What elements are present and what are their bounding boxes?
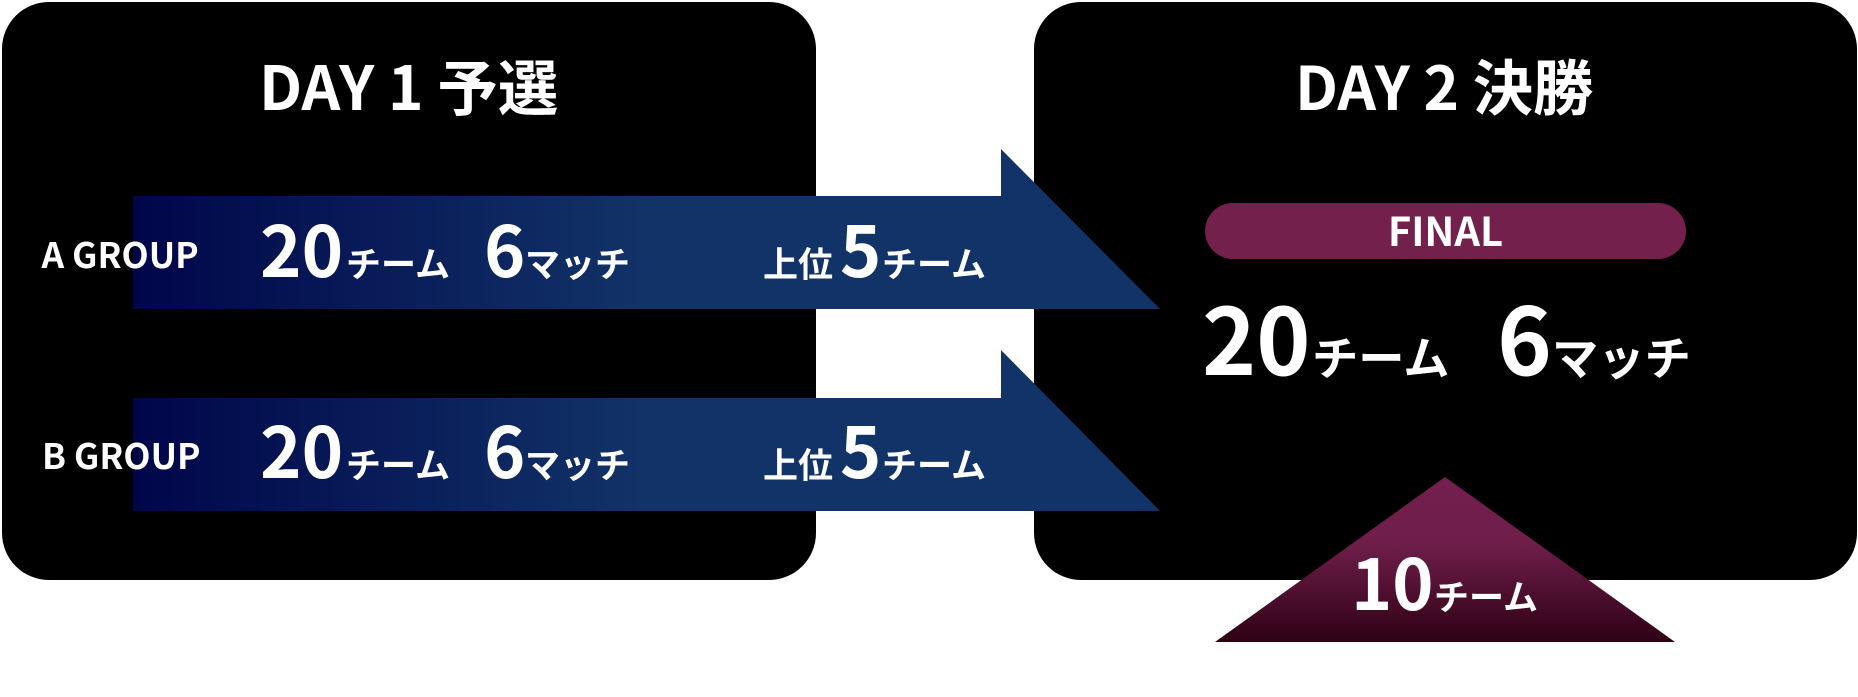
arrow: A group [133,149,1160,309]
triangle: 10 teams [1215,477,1675,642]
B group stats: 20 [260,397,343,499]
final stats: マッチ [1552,322,1691,389]
label: final: FINAL [1388,200,1503,258]
panel: day 2 [1034,2,1857,580]
panel: day 1 [2,2,816,580]
B group stats: マッチ [525,438,630,489]
A group stats: 5 [840,197,881,298]
final stats: 6 [1497,267,1552,402]
final stats: 20 [1202,269,1311,402]
heading: day 2: DAY 2 決勝 [1295,41,1593,128]
B group stats [260,397,986,499]
B group stats: 6 [484,398,525,499]
B group stats: チーム [346,438,450,489]
pill: final [1205,203,1686,259]
final stats [1202,267,1691,402]
A group stats: チーム [882,237,986,288]
triangle label: 10 teams: チーム [1434,570,1538,621]
final stats: チーム [1312,322,1450,389]
A group stats: 6 [484,197,525,298]
A group stats: マッチ [525,237,630,288]
A group stats [260,196,986,298]
triangle label: 10 teams: 10 [1351,530,1434,631]
A group stats: 上位 [763,237,833,288]
label: A group: A GROUP [40,228,199,279]
A group stats: チーム [346,237,450,288]
B group stats: 上位 [763,438,833,489]
B group stats: チーム [882,438,986,489]
label: B group: B GROUP [42,429,201,480]
A group stats: 20 [260,196,343,298]
triangle label: 10 teams [1351,530,1538,631]
heading: day 1: DAY 1 予選 [259,41,558,128]
B group stats: 5 [840,398,881,499]
arrow: B group [133,350,1160,511]
